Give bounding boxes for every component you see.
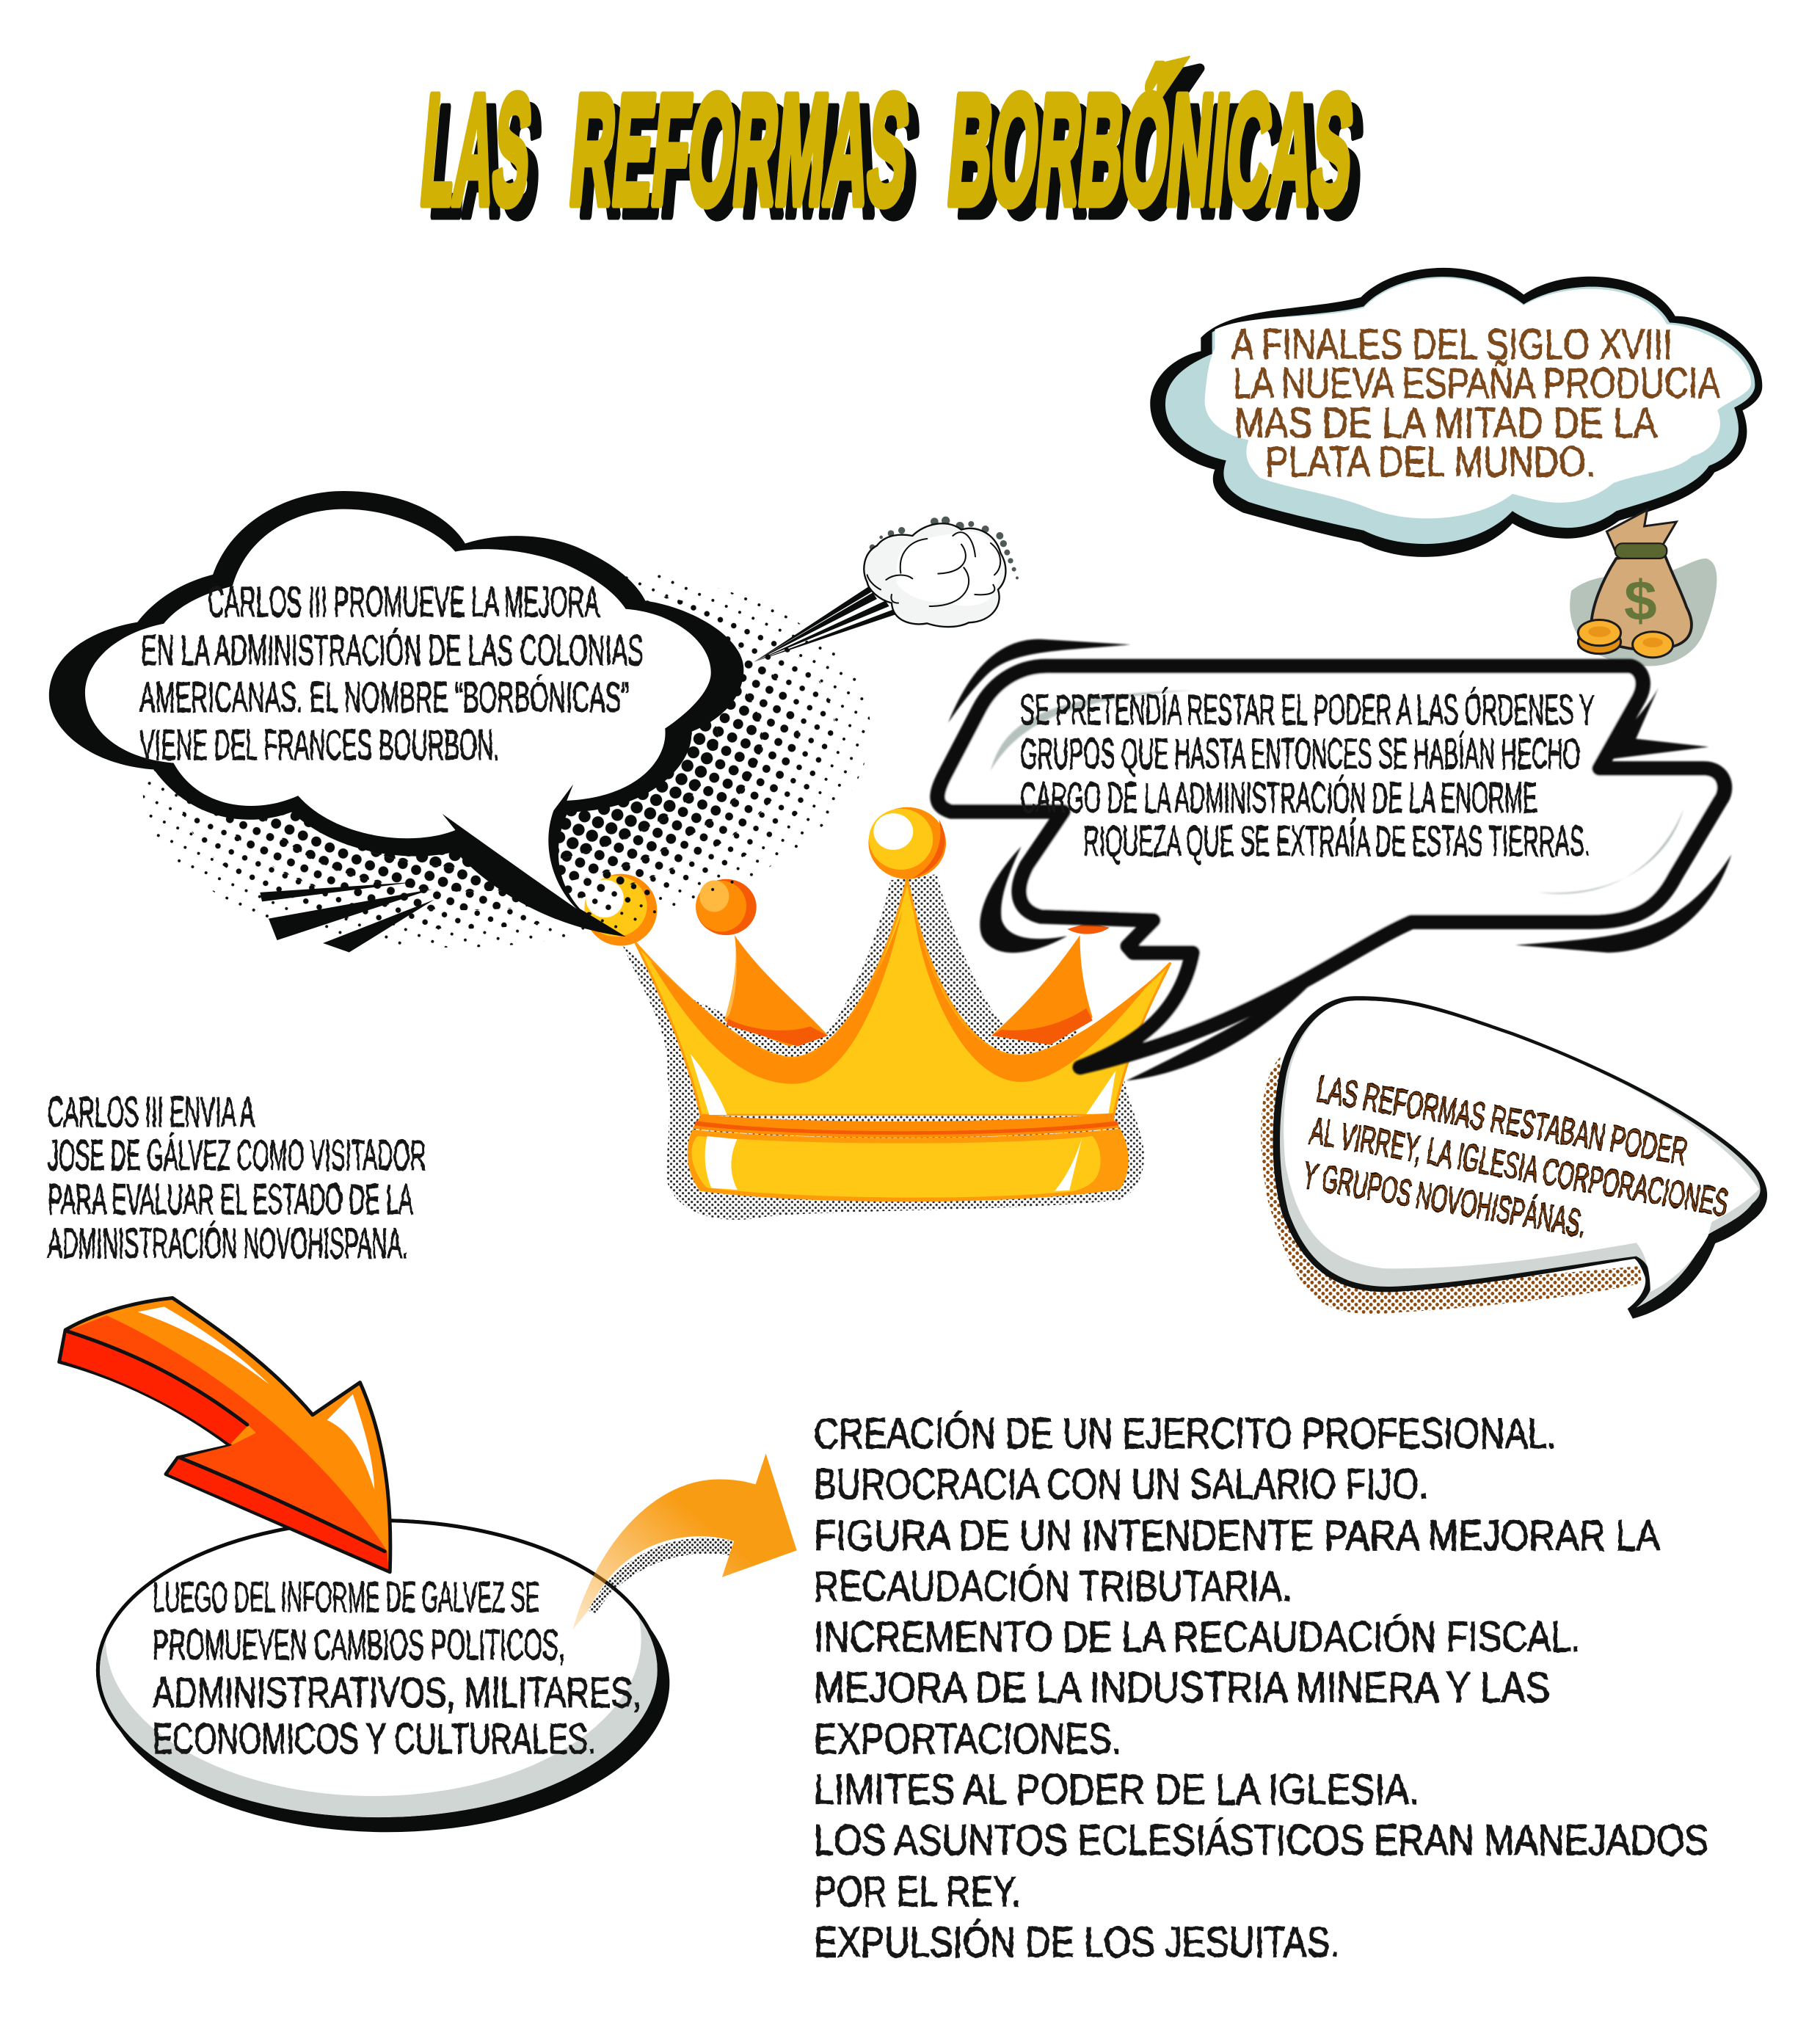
arrow shape [572, 1453, 797, 1629]
title: REFORMAS [575, 75, 926, 249]
crown halftone shadow [623, 874, 1144, 1220]
bubble text: Y GRUPOS NOVOHISPÁNAS. [1300, 1155, 1590, 1246]
silver cloud text [1231, 321, 1720, 486]
cloud text [139, 578, 644, 769]
ellipse text [153, 1574, 641, 1763]
cloud black outline [1150, 268, 1762, 557]
halftone dots behind the cloud [123, 533, 889, 982]
list of reforms: EXPULSIÓN DE LOS JESUITAS. [814, 1919, 1340, 1966]
list of reforms: BUROCRACIA CON UN SALARIO FIJO. [814, 1461, 1428, 1508]
puff inner curls [867, 532, 1000, 606]
puff cloud with speed lines [754, 517, 1019, 662]
list of reforms: INCREMENTO DE LA RECAUDACIÓN FISCAL. [814, 1613, 1581, 1661]
silver cloud text: PLATA DEL MUNDO. [1265, 438, 1595, 486]
arrow halftone shadow [588, 1538, 732, 1613]
ellipse bubble [95, 1519, 669, 1832]
ellipse text: PROMUEVEN CAMBIOS POLITICOS, [153, 1621, 565, 1669]
cloud text: EN LA ADMINISTRACIÓN DE LAS COLONIAS [141, 627, 644, 675]
cloud blue shade [1165, 277, 1755, 544]
crown illustration [585, 807, 1171, 1220]
title: LAS [415, 63, 538, 237]
ellipse highlight [106, 1522, 641, 1797]
rounded speech bubble [1261, 996, 1767, 1319]
list of reforms: RECAUDACIÓN TRIBUTARIA. [814, 1563, 1292, 1610]
bubble white interior [1284, 1000, 1759, 1292]
cloud outline [49, 491, 743, 937]
left text block [48, 1088, 426, 1268]
bubble text [1020, 686, 1594, 865]
left text block: JOSE DE GÁLVEZ COMO VISITADOR [48, 1132, 426, 1179]
list of reforms: MEJORA DE LA INDUSTRIA MINERA Y LAS [814, 1664, 1550, 1712]
cloud text: VIENE DEL FRANCES BOURBON. [139, 721, 500, 769]
speed lines [754, 586, 895, 662]
cloud interior [85, 509, 711, 909]
list of reforms: EXPORTACIONES. [814, 1715, 1121, 1763]
puff halftone [870, 517, 1019, 579]
swoosh strokes [948, 639, 1731, 1081]
bubble outline [938, 666, 1725, 1067]
ellipse shadow [105, 1533, 669, 1832]
bubble halftone shadow [1261, 1057, 1642, 1314]
list of reforms: POR EL REY. [814, 1868, 1021, 1916]
bubble grey shade [1280, 1000, 1761, 1308]
ellipse text: ADMINISTRATIVOS, MILITARES, [153, 1669, 641, 1717]
crown band [688, 1113, 1129, 1201]
money bag: $ [1624, 570, 1657, 633]
left text block: CARLOS III ENVIA A [48, 1088, 255, 1136]
silver cloud text: A FINALES DEL SIGLO XVIII [1231, 321, 1672, 368]
silver cloud text: MAS DE LA MITAD DE LA [1234, 399, 1657, 447]
bubble outline [1273, 996, 1767, 1319]
speech cloud: Carlos III [49, 491, 743, 953]
cloud text: CARLOS III PROMUEVE LA MEJORA [208, 578, 600, 626]
silver cloud with text [1150, 268, 1762, 666]
cloud text: AMERICANAS. EL NOMBRE “BORBÓNICAS” [139, 674, 629, 721]
crown back spikes [696, 879, 1110, 1047]
ellipse text: LUEGO DEL INFORME DE GALVEZ SE [153, 1574, 539, 1621]
grey accents [990, 691, 1684, 894]
ellipse text: ECONOMICOS Y CULTURALES. [153, 1715, 596, 1763]
ellipse body [98, 1521, 659, 1819]
burst speed lines [260, 882, 434, 953]
list of reforms [814, 1410, 1708, 1966]
title: LAS [426, 75, 548, 249]
puff body [864, 523, 1005, 627]
money bag [1570, 510, 1717, 666]
red-orange arrow [59, 1298, 390, 1572]
list of reforms: LIMITES AL PODER DE LA IGLESIA. [814, 1766, 1419, 1814]
cloud white interior [1205, 278, 1751, 518]
list of reforms: FIGURA DE UN INTENDENTE PARA MEJORAR LA [814, 1512, 1660, 1560]
left text block: PARA EVALUAR EL ESTADO DE LA [48, 1176, 413, 1224]
title: REFORMAS [564, 63, 916, 237]
jagged speech bubble [938, 639, 1731, 1081]
curved orange arrow [572, 1453, 797, 1629]
list of reforms: CREACIÓN DE UN EJERCITO PROFESIONAL. [814, 1410, 1557, 1458]
puff highlight [896, 531, 1000, 606]
crown ball finials [585, 807, 946, 946]
left text block: ADMINISTRACIÓN NOVOHISPANA. [48, 1220, 408, 1268]
crown body [636, 879, 1171, 1115]
title [415, 57, 1370, 249]
